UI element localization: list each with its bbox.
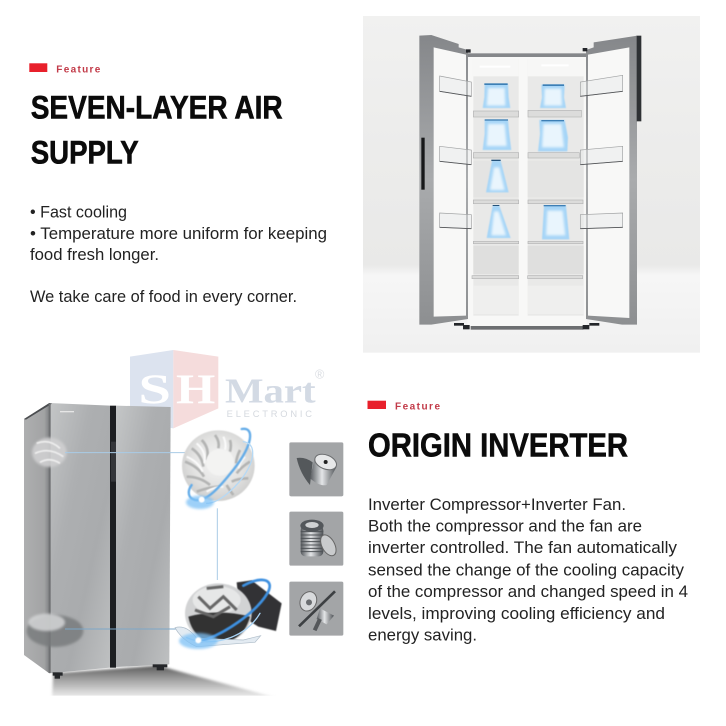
watermark: SH Mart Electronic: ELECTRONIC — [227, 409, 312, 419]
icon: inverter compressor with orbit — [175, 580, 282, 649]
text block: air supply benefits: • Temperature more uniform for keeping — [30, 224, 327, 243]
icon: inverter fan with orbit — [182, 429, 255, 509]
panel: closed refrigerator with inverter parts — [24, 350, 343, 703]
blue orbit — [187, 580, 270, 642]
hinges — [454, 48, 599, 329]
heading: seven-layer air supply — [31, 89, 283, 170]
text block: air supply benefits: food fresh longer. — [30, 245, 159, 264]
watermark: SH Mart Electronic: ® — [315, 367, 325, 381]
watermark: SH Mart Electronic: H — [176, 367, 215, 414]
heading: origin inverter: ORIGIN INVERTER — [368, 428, 628, 465]
text block: inverter description: sensed the change of the cooling capacity — [368, 560, 684, 580]
text block: inverter description: Both the compressor and the fan are — [368, 517, 642, 536]
text block: inverter description: of the compressor and changed speed in 4 — [368, 582, 688, 601]
text block: inverter description: Inverter Compressor+Inverter Fan. — [368, 495, 626, 514]
connector lines — [65, 453, 217, 629]
door display panel — [111, 442, 116, 482]
icon tile: coil part — [289, 512, 343, 566]
right door — [580, 36, 641, 325]
icon tile: shaft and bearing part — [289, 582, 343, 636]
panel: open refrigerator photo — [363, 16, 700, 353]
feature tag: origin inverter — [368, 401, 440, 412]
interior shelves — [472, 110, 583, 279]
feature tag: seven-layer air supply — [29, 63, 101, 75]
text block: inverter description: levels, improving cooling efficiency and — [368, 604, 665, 623]
blue orbit — [189, 429, 253, 503]
floor shadow — [51, 665, 268, 696]
heading: seven-layer air supply: SEVEN-LAYER AIR — [31, 89, 283, 125]
watermark: SH Mart Electronic — [130, 350, 325, 428]
door bins — [440, 76, 471, 229]
feature tag: seven-layer air supply: Feature — [56, 64, 101, 75]
text block: air supply benefits: We take care of food in every corner. — [30, 287, 297, 306]
blue air flows — [483, 83, 569, 239]
watermark: SH Mart Electronic: Mart — [225, 373, 316, 411]
text block: inverter description — [368, 495, 688, 645]
text block: air supply benefits — [30, 202, 327, 306]
feet — [53, 664, 167, 679]
watermark: SH Mart Electronic: S — [138, 367, 171, 414]
refrigerator body — [24, 403, 171, 679]
text block: inverter description: energy saving. — [368, 626, 477, 645]
left door — [419, 35, 471, 325]
door bins — [580, 75, 623, 229]
refrigerator interior — [467, 53, 587, 330]
icon tile: fan motor part — [289, 442, 343, 496]
feature tag: origin inverter: Feature — [395, 401, 440, 412]
text block: air supply benefits: • Fast cooling — [30, 202, 127, 222]
ghost parts inside refrigerator — [27, 438, 83, 647]
text block: inverter description: inverter controlled. The fan automatically — [368, 538, 678, 557]
heading: seven-layer air supply: SUPPLY — [31, 134, 139, 170]
